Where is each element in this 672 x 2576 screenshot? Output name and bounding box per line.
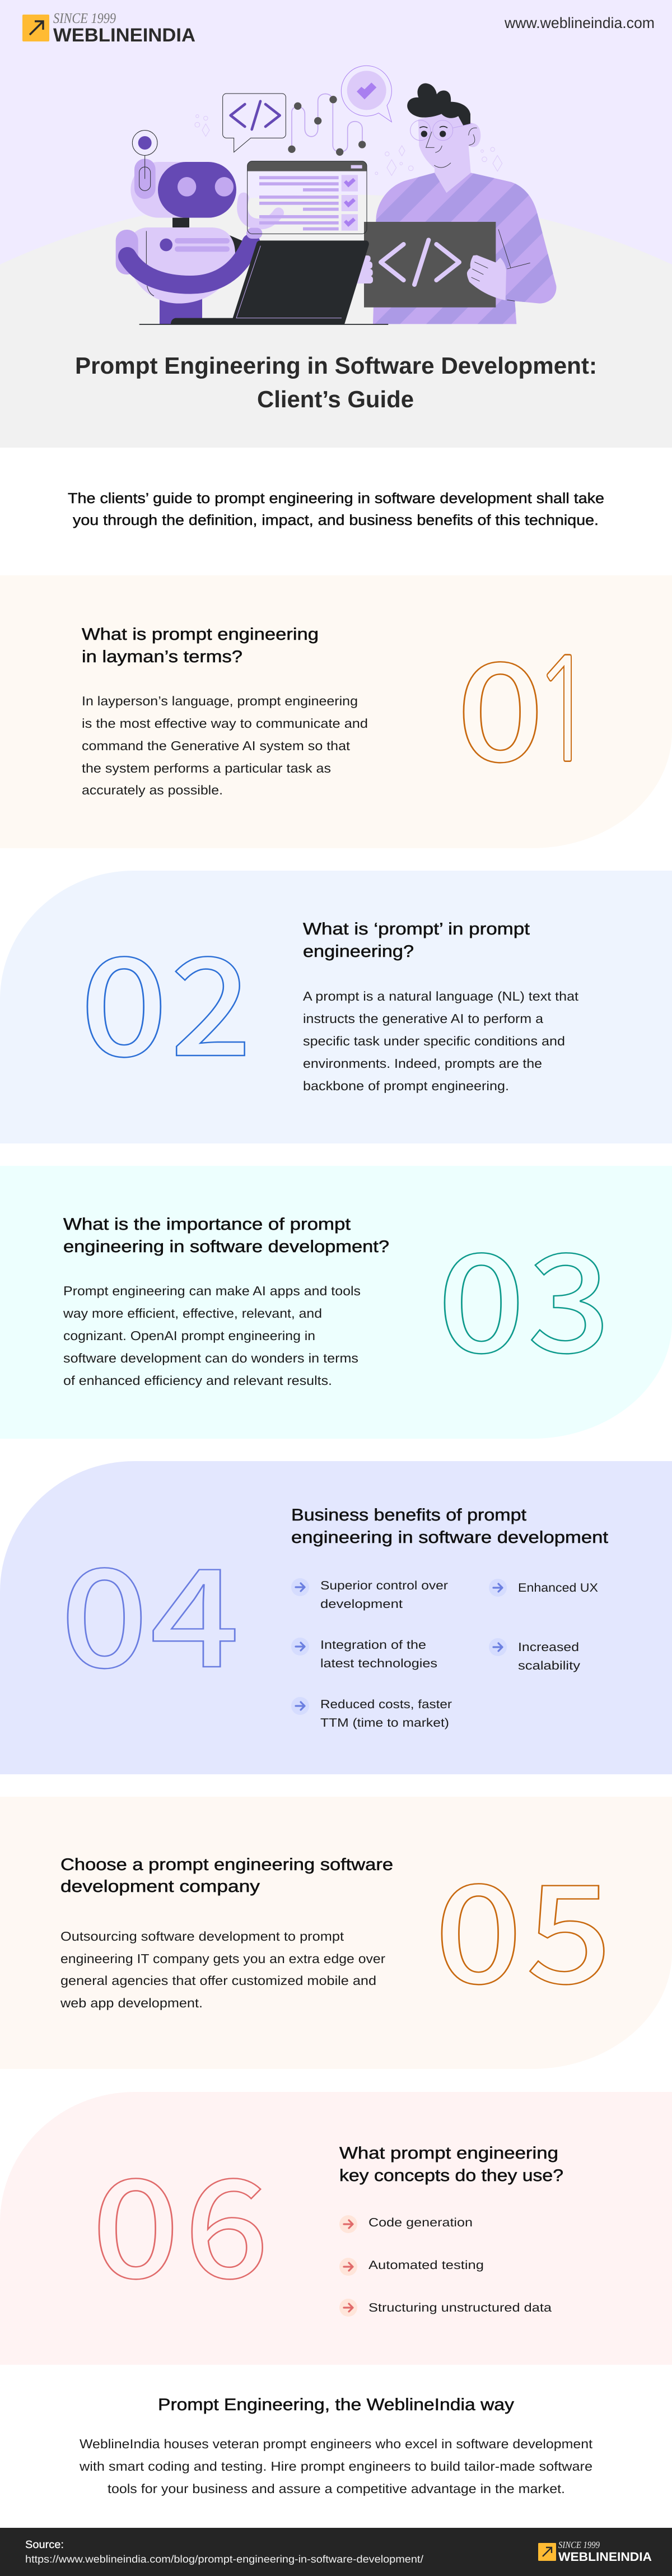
- footer logo: SINCE 1999: [558, 2540, 600, 2550]
- number 02: 0: [80, 898, 168, 1095]
- bullet: superior control: [291, 1578, 448, 1611]
- body text: accurately as possible.: [82, 783, 223, 797]
- bullet: superior control: development: [320, 1597, 403, 1611]
- body text: [60, 1929, 385, 2010]
- body text: way more efficient, effective, relevant, and: [63, 1306, 322, 1320]
- panel: 04 business benefits: [0, 1461, 672, 1774]
- logo: [22, 10, 195, 46]
- intro text: The clients’ guide to prompt engineering in software development shall take: [68, 490, 604, 506]
- heading: [291, 1506, 609, 1547]
- bullet: scalability: scalability: [518, 1659, 580, 1672]
- heading: [82, 625, 319, 666]
- closing text: [79, 2436, 593, 2496]
- bullet: scalability: [489, 1638, 580, 1672]
- number 06: 6: [184, 2120, 269, 2317]
- body text: specific task under specific conditions and: [303, 1034, 565, 1048]
- number 01: 1: [532, 639, 596, 782]
- body text: general agencies that offer customized mobile and: [60, 1973, 376, 1988]
- number 02: 2: [170, 898, 251, 1095]
- source: Source:: [25, 2539, 64, 2551]
- bullet: scalability: Increased: [518, 1640, 579, 1654]
- number 04: [60, 1509, 240, 1706]
- number 06: 0: [92, 2120, 180, 2317]
- laptop: [171, 240, 369, 324]
- number 03: 3: [528, 1194, 610, 1391]
- heading: Choose a prompt engineering software: [60, 1856, 393, 1874]
- heading: What is prompt engineering: [82, 625, 319, 644]
- logo wordmark: WEBLINEINDIA: [53, 25, 195, 46]
- heading: What prompt engineering: [339, 2144, 558, 2163]
- heading: [303, 920, 530, 961]
- decorative sparkles left: [195, 115, 209, 136]
- heading: What is ‘prompt’ in prompt: [303, 920, 530, 938]
- bullet: reduced costs: Reduced costs, faster: [320, 1698, 452, 1711]
- body text: [303, 989, 579, 1093]
- person: [357, 83, 557, 324]
- body text: Prompt engineering can make AI apps and tools: [63, 1284, 361, 1298]
- bullet: integration: latest technologies: [320, 1657, 437, 1670]
- body text: web app development.: [60, 1996, 203, 2010]
- body text: backbone of prompt engineering.: [303, 1078, 509, 1093]
- bullet: superior control: Superior control over: [320, 1579, 448, 1592]
- body text: the system performs a particular task as: [82, 761, 331, 775]
- heading: development company: [60, 1877, 260, 1896]
- ground line: [139, 323, 388, 326]
- body text: software development can do wonders in terms: [63, 1351, 358, 1365]
- bullet: structuring data: Structuring unstructured data: [368, 2301, 552, 2314]
- bullet: code generation: [339, 2215, 473, 2233]
- panel: 05 choose a company: [0, 1797, 672, 2069]
- number 02: [80, 898, 251, 1095]
- heading: [339, 2144, 563, 2185]
- heading: engineering in software development: [291, 1528, 609, 1547]
- panel: 06 key concepts: [0, 2092, 672, 2365]
- number 05: 5: [526, 1825, 612, 2022]
- number 05: [435, 1825, 612, 2022]
- number 06: [92, 2120, 269, 2317]
- heading: Business benefits of prompt: [291, 1506, 527, 1524]
- body text: environments. Indeed, prompts are the: [303, 1056, 542, 1071]
- footer logo: WEBLINEINDIA: [558, 2550, 652, 2564]
- bullet: structuring data: [339, 2299, 552, 2317]
- number 01: [456, 603, 596, 800]
- body text: instructs the generative AI to perform a: [303, 1011, 543, 1026]
- heading: key concepts do they use?: [339, 2166, 563, 2185]
- number 03: [437, 1194, 610, 1391]
- illustration: robot and developer: [115, 65, 557, 325]
- footer: [0, 2528, 672, 2576]
- bullet: enhanced UX: Enhanced UX: [518, 1581, 598, 1594]
- bullet: integration: Integration of the: [320, 1638, 426, 1652]
- bullet: reduced costs: TTM (time to market): [320, 1716, 449, 1729]
- body text: A prompt is a natural language (NL) text that: [303, 989, 579, 1003]
- footer logo: [538, 2540, 652, 2564]
- heading: [63, 1215, 389, 1256]
- intro text: you through the definition, impact, and business benefits of this technique.: [73, 512, 599, 528]
- number 03: 0: [437, 1194, 525, 1391]
- closing text: with smart coding and testing. Hire prompt engineers to build tailor-made software: [79, 2459, 592, 2473]
- number 01: 0: [456, 603, 544, 800]
- body text: command the Generative AI system so that: [82, 738, 351, 753]
- panel: 03 importance: [0, 1166, 672, 1439]
- hero background: [0, 0, 672, 448]
- body text: [63, 1284, 361, 1388]
- closing text: tools for your business and assure a competitive advantage in the market.: [108, 2481, 565, 2496]
- closing heading: Prompt Engineering, the WeblineIndia way: [158, 2396, 514, 2414]
- website url: www.weblineindia.com: [504, 15, 655, 31]
- bullet: automated testing: Automated testing: [368, 2258, 484, 2272]
- bullet: integration: [291, 1638, 437, 1670]
- number 04: 0: [60, 1509, 148, 1706]
- heading: What is the importance of prompt: [63, 1215, 351, 1234]
- source: [25, 2539, 424, 2565]
- bullet: code generation: Code generation: [368, 2216, 473, 2229]
- code speech bubble: [223, 94, 286, 152]
- bullet: reduced costs: [291, 1697, 452, 1729]
- panel: 01 layman's terms: [0, 575, 672, 848]
- checklist window: [248, 161, 367, 234]
- heading: [60, 1856, 393, 1896]
- heading: in layman’s terms?: [82, 648, 242, 666]
- logo tagline: SINCE 1999: [53, 10, 116, 26]
- flow line with nodes: [288, 94, 366, 156]
- panel: 02 what is prompt: [0, 871, 672, 1143]
- heading: engineering in software development?: [63, 1238, 389, 1256]
- body text: of enhanced efficiency and relevant results.: [63, 1373, 332, 1388]
- number 05: 0: [435, 1825, 522, 2022]
- closing text: WeblineIndia houses veteran prompt engineers who excel in software development: [80, 2436, 593, 2451]
- body text: In layperson’s language, prompt engineering: [82, 694, 358, 708]
- body text: is the most effective way to communicate and: [82, 716, 368, 731]
- bullet: automated testing: [339, 2258, 484, 2276]
- main title: Client’s Guide: [257, 386, 414, 412]
- body text: engineering IT company gets you an extra edge over: [60, 1951, 385, 1966]
- main title: Prompt Engineering in Software Development:: [75, 352, 597, 379]
- body text: [82, 694, 368, 797]
- intro text: [68, 490, 604, 528]
- body text: cognizant. OpenAI prompt engineering in: [63, 1328, 315, 1343]
- check speech bubble: [341, 66, 391, 122]
- bullet: enhanced UX: [489, 1579, 598, 1597]
- logo mark: [22, 15, 49, 41]
- heading: engineering?: [303, 942, 414, 961]
- robot and laptop: [116, 66, 391, 324]
- main title: [75, 352, 597, 412]
- number 04: 4: [150, 1509, 240, 1706]
- source: https://www.weblineindia.com/blog/prompt-engineering-in-software-development/: [25, 2553, 424, 2565]
- body text: Outsourcing software development to prompt: [60, 1929, 344, 1943]
